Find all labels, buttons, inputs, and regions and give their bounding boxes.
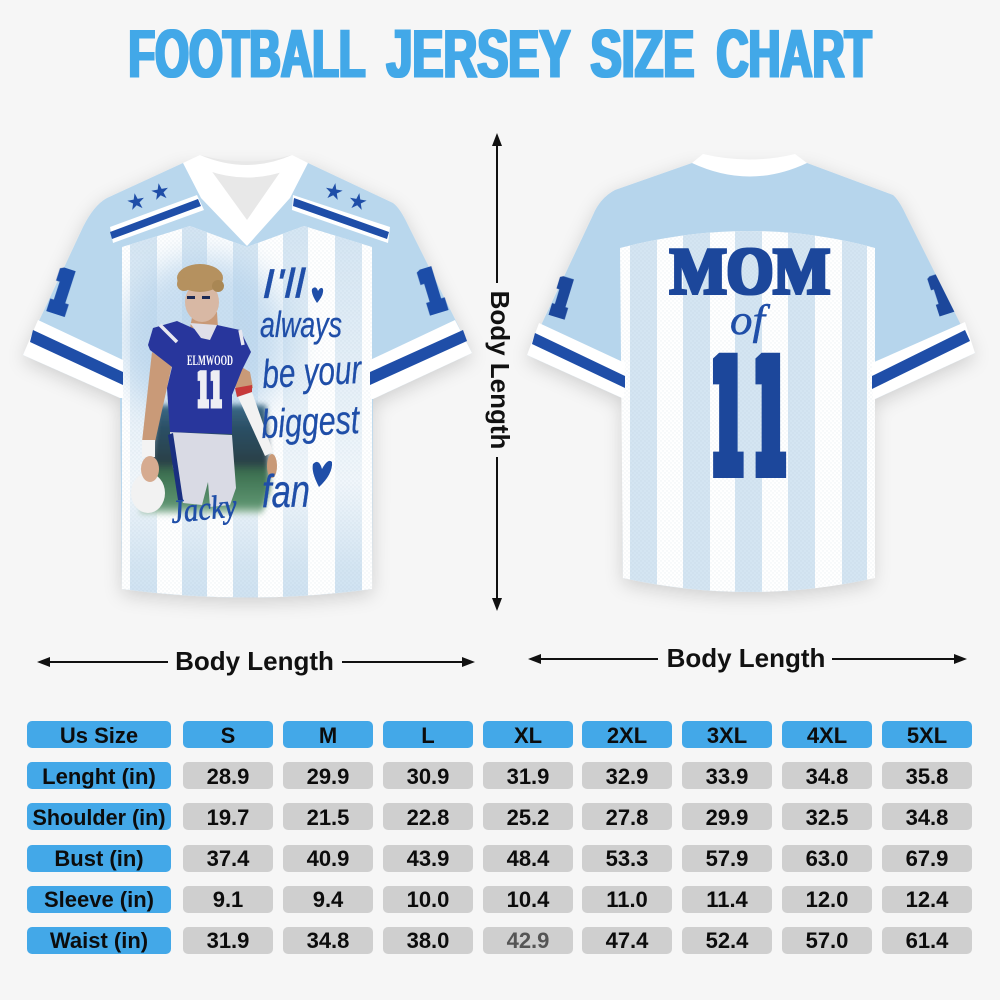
slogan: I'll [262, 260, 307, 307]
waist row: 42.9 [507, 928, 549, 953]
team name: ELMWOOD [187, 353, 233, 369]
sleeve row: 11.4 [706, 887, 749, 912]
bust row: 48.4 [507, 846, 550, 871]
waist row: 61.4 [906, 928, 949, 953]
header row [27, 721, 972, 748]
player uniform [148, 321, 251, 434]
of script: of [730, 298, 771, 344]
length row: 34.8 [806, 764, 848, 789]
header row: S [221, 723, 235, 748]
left sleeve number: 1 [44, 260, 79, 327]
sleeve row [27, 886, 972, 913]
heart large [313, 461, 332, 487]
player number [198, 364, 221, 419]
bust row: 43.9 [407, 846, 449, 871]
slogan [260, 260, 364, 517]
left sleeve hem [23, 320, 123, 398]
wristband and hand [141, 440, 159, 482]
length row [27, 762, 972, 789]
shoulder row: 21.5 [307, 805, 349, 830]
shoulder row: 25.2 [507, 805, 549, 830]
right sleeve hem [370, 320, 472, 399]
header row: 3XL [707, 723, 747, 748]
left arm [142, 352, 172, 442]
vertical arrow: body length [485, 133, 515, 611]
bust row: 63.0 [806, 846, 848, 871]
heart small [312, 287, 323, 303]
length row: 28.9 [207, 764, 249, 789]
sleeve row: 12.4 [906, 887, 949, 912]
sleeve row: 10.4 [507, 887, 550, 912]
body stripes [120, 220, 375, 610]
waist row: 52.4 [706, 928, 749, 953]
bust row: 40.9 [307, 846, 349, 871]
left sleeve hem [527, 323, 625, 398]
head [177, 264, 224, 328]
horizontal arrow right: body length [528, 643, 967, 673]
title: SIZE [590, 16, 694, 92]
body stripes [620, 231, 875, 592]
shoulder row: 22.8 [407, 805, 449, 830]
right sleeve number: 1 [415, 259, 450, 326]
header row: 2XL [607, 723, 647, 748]
right sleeve number: 1 [927, 268, 956, 324]
sleeve row: 10.0 [407, 887, 449, 912]
waist row: 34.8 [307, 928, 349, 953]
left sleeve number: 1 [548, 271, 576, 327]
title: CHART [716, 16, 872, 92]
stars: ★ [322, 178, 346, 207]
player photo [131, 264, 277, 531]
length row: 31.9 [507, 764, 549, 789]
MOM text: MOM [670, 234, 830, 308]
bust row: 57.9 [706, 846, 748, 871]
right sleeve hem [872, 322, 975, 400]
neckline [190, 323, 217, 340]
horizontal arrow right: body length: Body Length [667, 643, 825, 673]
sleeve row: 12.0 [806, 887, 848, 912]
collar [183, 155, 308, 246]
title: FOOTBALL [128, 16, 366, 92]
size table [27, 721, 972, 954]
player number: 1 [198, 364, 208, 419]
length row: 29.9 [307, 764, 349, 789]
waist row [27, 927, 972, 954]
waist row: 38.0 [407, 928, 449, 953]
vertical arrow: body length: Body Length [485, 291, 515, 449]
shoulder row: 32.5 [806, 805, 848, 830]
waist row: 31.9 [207, 928, 249, 953]
slogan: be your [261, 348, 364, 397]
length row: 32.9 [606, 764, 648, 789]
number 11: 1 [715, 324, 740, 516]
stadium backdrop [140, 405, 270, 514]
shoulder row [27, 803, 972, 830]
slogan: biggest [260, 398, 362, 447]
player number: 1 [211, 364, 221, 419]
stars: ★ [124, 188, 148, 217]
slogan: always [260, 304, 342, 345]
waist row: Waist (in) [50, 928, 148, 953]
uniform shoulder marks [160, 325, 243, 345]
shoulder row: 29.9 [706, 805, 748, 830]
header row: L [421, 723, 435, 748]
horizontal arrow left: body length: Body Length [175, 646, 334, 676]
slogan: fan [262, 465, 310, 517]
bust row [27, 845, 972, 872]
bust row: 67.9 [906, 846, 948, 871]
jersey silhouette [23, 163, 472, 598]
header row: M [319, 723, 337, 748]
front jersey [23, 155, 472, 610]
right arm [233, 362, 277, 478]
header row: XL [514, 723, 542, 748]
shoulder row: 34.8 [906, 805, 948, 830]
helmet [131, 473, 165, 513]
shoulder row: Shoulder (in) [32, 805, 166, 830]
collar [692, 154, 807, 176]
sleeve row: 11.0 [606, 887, 648, 912]
right shoulder stripes [292, 195, 390, 243]
shoulder row: 19.7 [207, 805, 249, 830]
length row: 35.8 [906, 764, 948, 789]
shoulder row: 27.8 [606, 805, 648, 830]
bust row: Bust (in) [54, 846, 144, 871]
length row: Lenght (in) [42, 764, 156, 789]
length row: 33.9 [706, 764, 748, 789]
jersey silhouette [527, 163, 975, 592]
title: JERSEY [386, 16, 570, 92]
stars: ★ [346, 188, 370, 217]
number 11: 1 [757, 324, 783, 516]
stars: ★ [148, 178, 172, 207]
waist row: 47.4 [606, 928, 649, 953]
length row: 30.9 [407, 764, 449, 789]
header row: 5XL [907, 723, 947, 748]
left shoulder stripes [110, 195, 204, 243]
stars [124, 178, 370, 217]
name script: Jacky [169, 488, 239, 531]
horizontal arrow left: body length [37, 646, 475, 676]
pants [170, 432, 236, 507]
pants stripe [168, 433, 183, 500]
sleeve row: Sleeve (in) [44, 887, 154, 912]
sleeve row: 9.1 [213, 887, 243, 912]
title [128, 16, 872, 92]
bust row: 53.3 [606, 846, 648, 871]
header row: 4XL [807, 723, 847, 748]
header row: Us Size [60, 723, 138, 748]
bust row: 37.4 [207, 846, 250, 871]
back jersey [527, 154, 975, 605]
waist row: 57.0 [806, 928, 848, 953]
sleeve row: 9.4 [313, 887, 344, 912]
number 11 [715, 324, 783, 516]
